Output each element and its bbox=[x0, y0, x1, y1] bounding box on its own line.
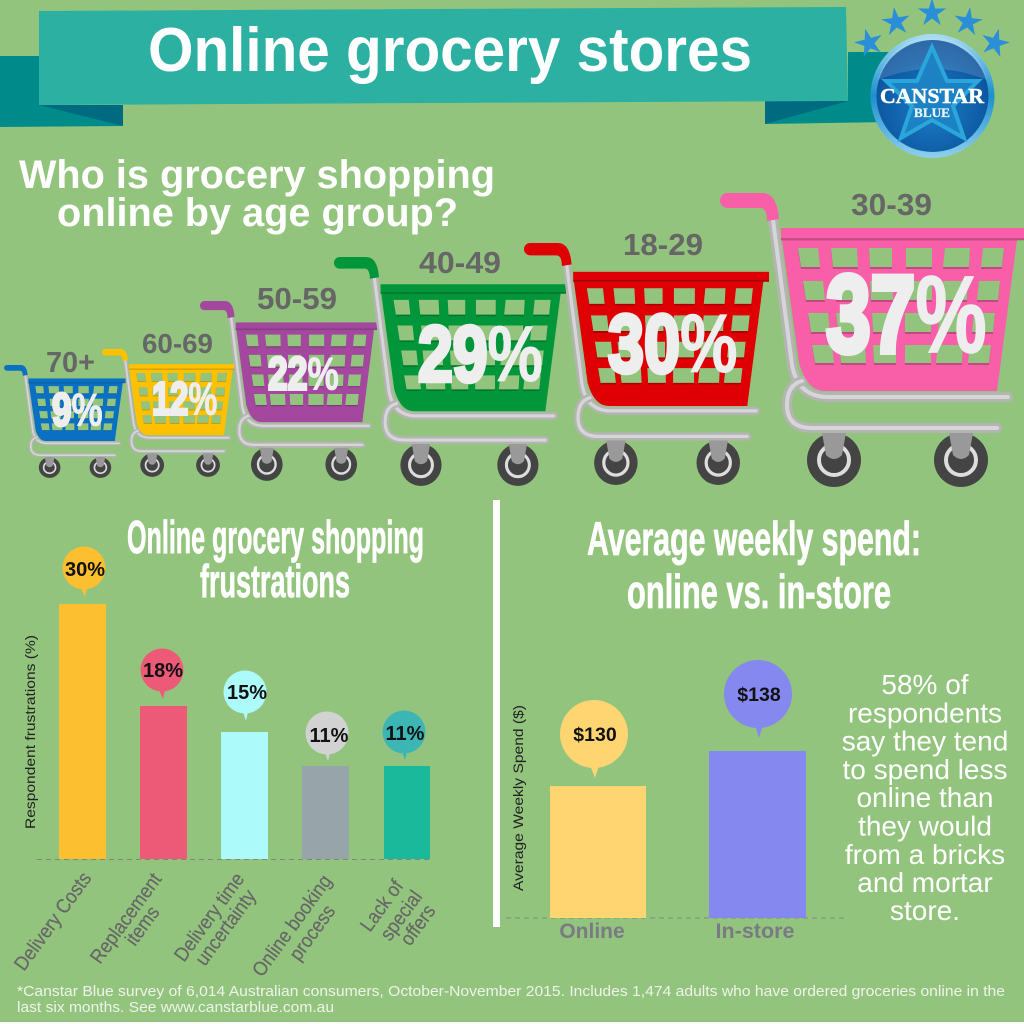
heading: average weekly spend: online vs. in-store bbox=[627, 565, 891, 618]
category labels: uncertainty bbox=[191, 886, 261, 970]
bar: online $130: Online bbox=[559, 920, 625, 943]
heading: who is shopping: online by age group? bbox=[57, 191, 458, 235]
cart: 18-29 30%: 30% bbox=[608, 297, 738, 390]
bar: replacement items 18%: 18% bbox=[143, 660, 183, 682]
text block: 58% of respondents: store. bbox=[890, 895, 960, 926]
bar: delivery costs 30%: 30% bbox=[65, 559, 105, 581]
bar: in-store $138 bbox=[709, 660, 806, 943]
category labels bbox=[10, 868, 441, 981]
heading: average weekly spend bbox=[587, 512, 921, 618]
bar chart: frustrations bbox=[10, 546, 441, 981]
cart: 40-49 29%: 29% bbox=[418, 311, 543, 399]
bar: online booking process 11% bbox=[302, 711, 349, 859]
bar: lack of special offers 11%: 11% bbox=[386, 723, 425, 745]
title banner bbox=[0, 7, 890, 127]
logo: Canstar Blue badge bbox=[870, 34, 994, 158]
y axis label: Average Weekly Spend ($) bbox=[510, 705, 526, 891]
cart: 50-59 22%: 22% bbox=[268, 348, 339, 400]
cart: 18-29 30%: 18-29 bbox=[623, 227, 703, 262]
bar: online $130 bbox=[550, 700, 646, 943]
bar: replacement items 18% bbox=[140, 648, 187, 859]
cart: 50-59 22%: 50-59 bbox=[257, 281, 337, 316]
bar: online booking process 11%: 11% bbox=[310, 725, 349, 747]
cart: 60-69 12%: 60-69 bbox=[142, 328, 213, 359]
cart: 40-49 29%: 40-49 bbox=[419, 245, 501, 280]
text block: 58% of respondents bbox=[842, 669, 1008, 926]
bar: in-store $138: $138 bbox=[737, 684, 781, 706]
text block: 58% of respondents: 58% of bbox=[881, 669, 969, 700]
icon: five rating stars bbox=[851, 0, 1013, 58]
logo: Canstar Blue badge: BLUE bbox=[914, 105, 950, 120]
category labels: special bbox=[376, 887, 427, 945]
bar: online $130: $130 bbox=[573, 724, 617, 746]
category labels: items bbox=[121, 902, 165, 950]
heading: frustrations: Online grocery shopping bbox=[127, 511, 424, 563]
footnote: last six months. See www.canstarblue.com.au bbox=[17, 1000, 334, 1016]
heading: frustrations: frustrations bbox=[200, 555, 350, 607]
cart: 60-69 12% bbox=[102, 328, 236, 477]
cart: 30-39 37%: 37% bbox=[826, 254, 987, 376]
text block: 58% of respondents: say they tend bbox=[842, 726, 1008, 756]
cart: 60-69 12%: 12% bbox=[152, 374, 217, 425]
bar: in-store $138: In-store bbox=[716, 920, 794, 943]
bar chart: weekly spend bbox=[506, 660, 847, 943]
y axis label: Respondent frustrations (%) bbox=[22, 635, 38, 829]
text block: 58% of respondents: respondents bbox=[848, 698, 1002, 728]
footnote: *Canstar Blue survey of 6,014 Australian consumers, October-November 2015. Includes 1,474 adults who have ordered groceries online in the bbox=[17, 984, 1005, 1000]
cart: 70+ 9%: 70+ bbox=[46, 347, 95, 379]
cart: 30-39 37%: 30-39 bbox=[851, 187, 932, 222]
cart: 18-29 30% bbox=[524, 227, 769, 485]
category labels: Delivery time bbox=[170, 869, 249, 966]
cart: 40-49 29% bbox=[334, 245, 566, 486]
text block: 58% of respondents: and mortar bbox=[857, 867, 993, 898]
heading: frustrations bbox=[127, 511, 424, 607]
category labels: Lack of bbox=[356, 876, 409, 936]
cart: 70+ 9% bbox=[4, 347, 126, 478]
text block: 58% of respondents: to spend less bbox=[842, 754, 1008, 785]
category labels: Replacement bbox=[86, 869, 167, 968]
category labels: process bbox=[285, 901, 340, 965]
footnote bbox=[17, 984, 1005, 1016]
category labels: Online booking bbox=[248, 871, 337, 981]
text block: 58% of respondents: they would bbox=[858, 810, 992, 842]
cart: 30-39 37% bbox=[720, 187, 1024, 487]
cart: 70+ 9%: 9% bbox=[52, 384, 103, 436]
text block: 58% of respondents: online than bbox=[856, 782, 994, 813]
bar: lack of special offers 11% bbox=[382, 710, 430, 859]
title: Online grocery stores bbox=[148, 16, 752, 85]
cart: 50-59 22% bbox=[200, 281, 378, 481]
logo: Canstar Blue badge: CANSTAR bbox=[880, 84, 985, 108]
category labels: Delivery Costs bbox=[10, 868, 96, 975]
category labels: offers bbox=[396, 901, 441, 950]
bar: delivery time uncertainty 15% bbox=[221, 670, 268, 859]
heading: who is shopping: Who is grocery shopping bbox=[19, 153, 495, 197]
text block: 58% of respondents: from a bricks bbox=[845, 839, 1005, 870]
heading: who is shopping bbox=[19, 153, 495, 235]
bar: delivery time uncertainty 15%: 15% bbox=[227, 682, 267, 704]
bar: delivery costs 30% bbox=[59, 546, 106, 859]
